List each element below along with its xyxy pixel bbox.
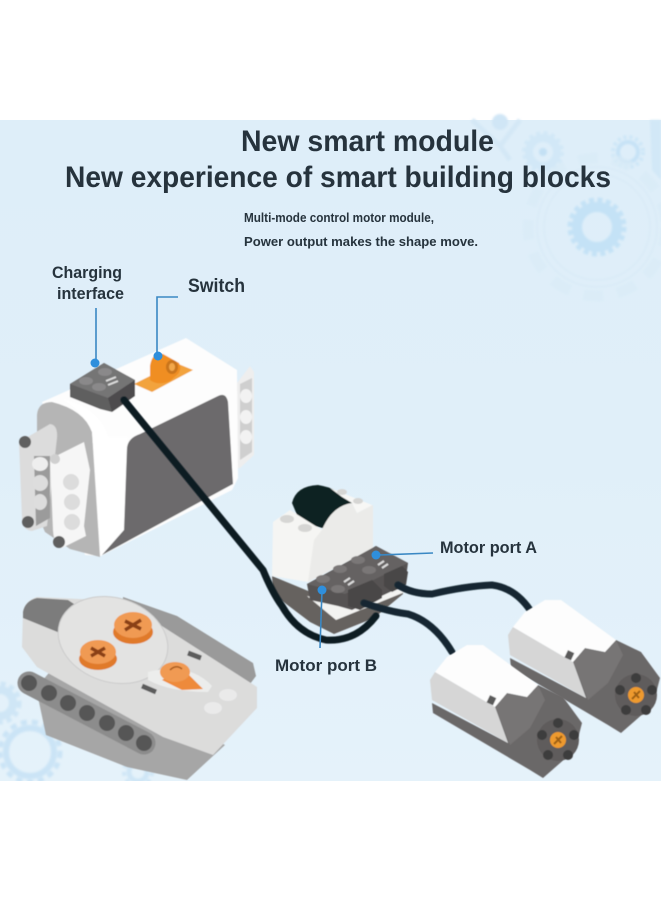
white body (42, 338, 238, 556)
label: charging interface: interface (57, 284, 124, 303)
main cable (124, 400, 376, 640)
left connector beams (19, 424, 90, 548)
beam with holes (21, 675, 152, 751)
dark base (272, 570, 403, 634)
remote control (21, 583, 257, 780)
studs (204, 702, 222, 714)
charging connector (70, 363, 135, 412)
label: charging interface (52, 263, 124, 303)
battery box (19, 338, 254, 557)
white front frame (62, 399, 128, 556)
port block (307, 546, 408, 610)
rotary module (272, 485, 408, 634)
leader: switch (154, 297, 178, 360)
white block (272, 503, 373, 582)
decorative gears: top right (472, 114, 661, 296)
subtitle: Multi-mode control motor module, (244, 210, 434, 225)
leader: motor port A (372, 550, 433, 560)
orange switch (134, 354, 193, 392)
grey left face (37, 402, 100, 557)
orange knob 2 (79, 640, 117, 670)
round dial (47, 583, 179, 697)
motor: front (430, 645, 582, 778)
black roller (292, 485, 353, 530)
label: switch: Switch (188, 276, 245, 297)
label: motor port B: Motor port B (275, 656, 377, 675)
leader: motor port B (318, 586, 326, 648)
label: motor port A: Motor port A (440, 538, 537, 557)
leader: charging interface (90, 308, 100, 368)
indicator marks (188, 653, 201, 658)
subtitle (244, 210, 478, 249)
subtitle: Power output makes the shape move. (244, 234, 478, 249)
motor cables (364, 585, 530, 652)
right side connector beam (237, 366, 254, 468)
motor: rear (508, 600, 660, 733)
decorative gears: bottom left (0, 684, 152, 786)
white plate (307, 584, 405, 620)
orange slider (148, 662, 212, 692)
dark grey battery cover (23, 598, 83, 633)
top shell (22, 597, 257, 755)
title: New smart module (241, 125, 494, 158)
dark front panel (102, 395, 233, 555)
label: charging interface: Charging (52, 263, 122, 282)
title (65, 125, 611, 194)
background panel (0, 120, 661, 781)
rear grey rim (123, 597, 256, 684)
orange knob 1 (113, 612, 153, 644)
title: New experience of smart building blocks (65, 161, 611, 194)
grey lower body (36, 660, 225, 780)
